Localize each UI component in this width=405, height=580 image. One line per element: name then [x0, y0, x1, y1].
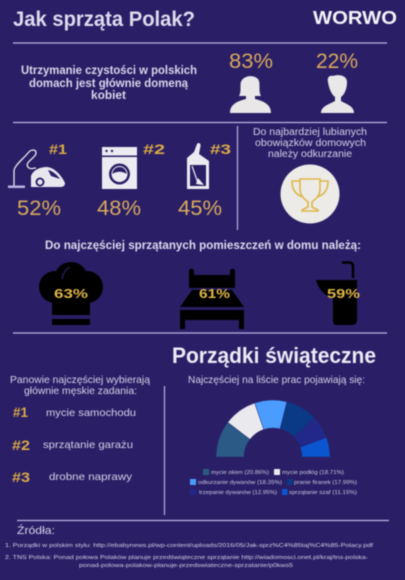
title: Jak sprząta Polak?: [13, 8, 195, 31]
panel: favourite chore: [253, 127, 367, 224]
task #2: #2: [12, 437, 30, 453]
text: men's tasks intro: głównie męskie zadania:: [24, 385, 137, 397]
panel: most cleaned rooms: [39, 240, 361, 329]
task #3: drobne naprawy: [49, 471, 133, 483]
icon: woman: [230, 76, 271, 113]
half-donut chart: [216, 400, 330, 457]
chart legend: pranie firanek (17.99%): [294, 480, 357, 486]
text: favourite chore is vacuuming: obowiązków domowych: [255, 138, 366, 149]
panel: holiday task list: [188, 374, 365, 496]
source 1: 1. Porządki w polskim stylu: http://ebabynews.pl/wp-content/uploads/2016/05/Jak-sprz%C4%85taj%C4%85-Polacy.pdf: [5, 543, 373, 549]
task #1: [13, 404, 136, 420]
rank #3: #3: [210, 141, 231, 157]
stat: 48%: 48%: [97, 197, 141, 220]
task #3: [12, 469, 133, 485]
chart legend: odkurzanie dywanów (18.35%): [198, 480, 282, 486]
panel: top 3 chores: [8, 141, 231, 220]
task #2: sprzątanie garażu: [43, 439, 133, 451]
chart legend: mycie podłóg (18.71%): [282, 470, 344, 476]
chart legend: sprzątanie szaf (11.15%): [289, 490, 357, 496]
icon: bed (bedroom): [180, 269, 244, 329]
source 2: [5, 555, 368, 569]
icon: man: [321, 75, 354, 113]
text: cleaning is mainly women's domain: domach jest głównie domeną: [29, 78, 189, 90]
stat: 59%: 59%: [327, 286, 361, 301]
text: men's tasks intro: Panowie najczęściej wybierają: [10, 374, 150, 386]
panel: sources: [5, 524, 373, 569]
icon: trophy: [280, 164, 340, 224]
rank #2: #2: [143, 141, 165, 157]
icon: cleaning bottle: [187, 143, 209, 189]
icon: sink (bathroom): [316, 262, 357, 325]
stat: 63%: 63%: [54, 286, 89, 301]
text: cleaning is mainly women's domain: kobiet: [91, 90, 126, 102]
chart legend: [190, 469, 357, 496]
heading: holiday cleaning: Porządki świąteczne: [172, 343, 376, 368]
panel: women vs men: [21, 50, 358, 113]
chart legend: mycie okien (20.86%): [211, 470, 269, 476]
text: favourite chore is vacuuming: Do najbardziej lubianych: [253, 127, 367, 138]
panel: men's tasks: [10, 374, 150, 485]
source 2: ponad-polowa-polakow-planuje-przedswiateczne-sprzatanie/p0kws5: [79, 563, 293, 569]
task #2: [12, 437, 133, 453]
task #1: #1: [13, 404, 28, 420]
source 2: 2. TNS Polska: Ponad połowa Polaków planuje przedświąteczne sprzątanie http://wiadomosci.onet.pl/kraj/tns-polska-: [5, 555, 368, 561]
sources heading: Źródła:: [17, 524, 55, 537]
stat: 52%: 52%: [17, 197, 61, 220]
task #1: mycie samochodu: [46, 407, 136, 419]
stat: women 83%: 83%: [229, 50, 273, 73]
stat: 61%: 61%: [199, 286, 231, 301]
heading: most cleaned rooms: Do najczęściej sprzątanych pomieszczeń w domu należą:: [45, 240, 361, 252]
chart heading: Najczęściej na liście prac pojawiają się:: [188, 374, 365, 386]
text: cleaning is mainly women's domain: [21, 65, 197, 102]
stat: men 22%: 22%: [316, 50, 358, 73]
chart legend: trzepanie dywanów (12.95%): [199, 490, 277, 496]
text: favourite chore is vacuuming: należy odkurzanie: [268, 149, 353, 160]
icon: chef hat (kitchen): [39, 262, 103, 325]
rank #1: #1: [49, 141, 67, 157]
text: cleaning is mainly women's domain: Utrzymanie czystości w polskich: [21, 65, 197, 77]
text: men's tasks intro: [10, 374, 150, 397]
text: favourite chore is vacuuming: [253, 127, 367, 160]
icon: vacuum cleaner: [8, 150, 65, 188]
stat: 45%: 45%: [178, 197, 222, 220]
logo: WORWO: WORWO: [313, 8, 397, 28]
task #3: #3: [12, 469, 30, 485]
icon: washing machine: [102, 147, 137, 189]
